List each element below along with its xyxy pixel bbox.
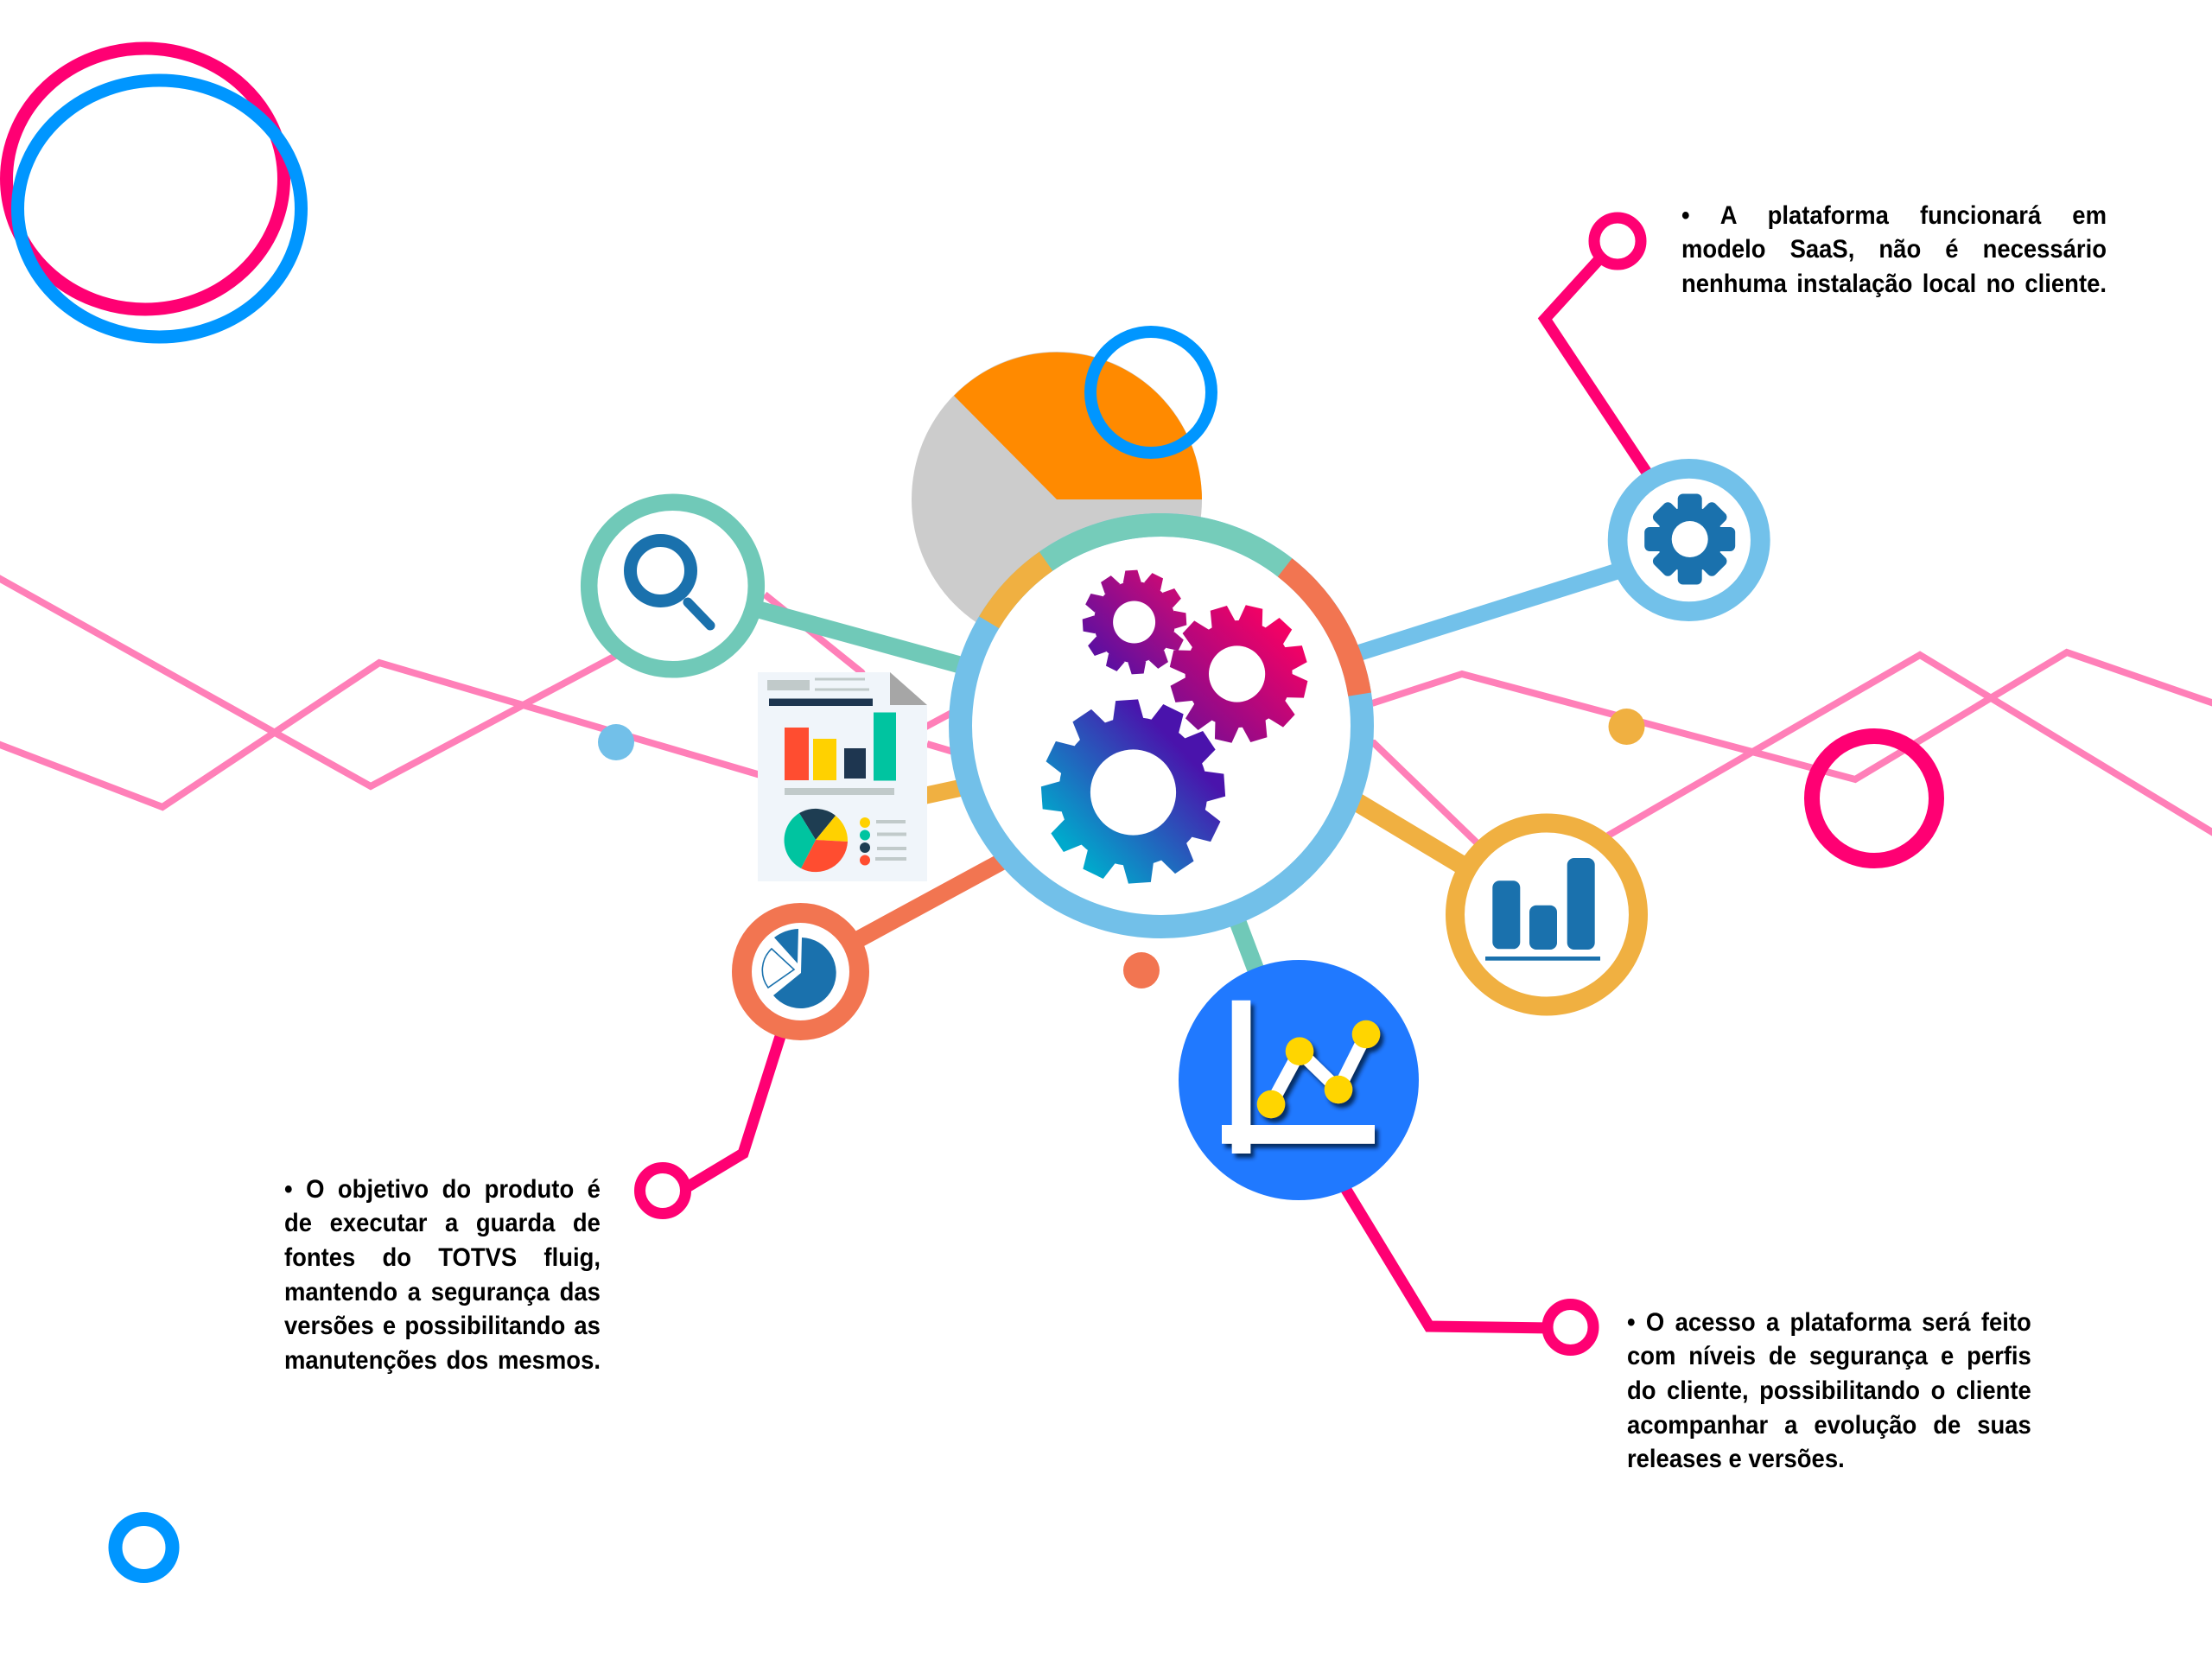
blue ring over pie	[1090, 332, 1211, 453]
text block: SaaS model: nenhuma instalação local no cliente.	[1681, 270, 2107, 298]
text block: product objective: manutenções dos mesmos.	[283, 1346, 600, 1375]
ring bottom left	[116, 1519, 173, 1576]
pink connector to left text	[639, 1028, 783, 1213]
document report icon	[758, 672, 927, 881]
text block: product objective: versões e possibilitando as	[283, 1312, 600, 1340]
bar chart badge	[1455, 823, 1638, 1006]
connector: amber to document	[916, 785, 972, 798]
connector: teal to line chart	[1234, 912, 1263, 989]
dot amber	[1609, 709, 1645, 745]
overlapping rings top left	[7, 48, 301, 337]
text block: product objective: • O objetivo do produto é	[283, 1175, 600, 1203]
line chart badge	[1179, 960, 1419, 1200]
text block: access levels	[1627, 1308, 2031, 1473]
pie chart badge	[741, 912, 859, 1030]
background pie chart	[912, 352, 1202, 647]
magnifier badge	[589, 502, 756, 670]
text block: access levels: releases e versões.	[1627, 1445, 1845, 1473]
text block: SaaS model: modelo SaaS, não é necessário	[1681, 235, 2107, 264]
text block: access levels: • O acesso a plataforma será feito	[1627, 1308, 2031, 1336]
text block: SaaS model	[1681, 200, 2107, 298]
dot light blue	[598, 724, 634, 760]
connector: teal to magnifier	[760, 610, 968, 667]
connector: amber to bar chart	[1352, 799, 1465, 867]
pink connector to top text	[1545, 218, 1652, 480]
text block: access levels: do cliente, possibilitando o cliente	[1627, 1376, 2031, 1405]
decorative pink zigzag lines	[0, 576, 2212, 847]
large gear	[1040, 699, 1225, 884]
gear badge	[1618, 468, 1760, 612]
text block: product objective: de executar a guarda de	[283, 1209, 600, 1237]
text block: SaaS model: • A plataforma funcionará em	[1681, 200, 2107, 230]
text block: product objective: mantendo a segurança das	[283, 1278, 600, 1306]
ring right	[1812, 736, 1936, 861]
pink connector to bottom text	[1344, 1185, 1593, 1350]
text block: product objective: fontes do TOTVS fluig,	[283, 1243, 600, 1272]
connector: light blue to gear	[1352, 570, 1620, 655]
medium gear	[1170, 605, 1308, 743]
connector: coral to pie icon	[855, 859, 1007, 941]
text block: access levels: com níveis de segurança e perfis	[1627, 1342, 2031, 1370]
text block: access levels: acompanhar a evolução de suas	[1627, 1411, 2031, 1440]
central hub ring	[961, 525, 1362, 926]
dot coral	[1123, 952, 1160, 988]
text block: product objective	[283, 1175, 600, 1375]
small gear	[1082, 570, 1187, 674]
